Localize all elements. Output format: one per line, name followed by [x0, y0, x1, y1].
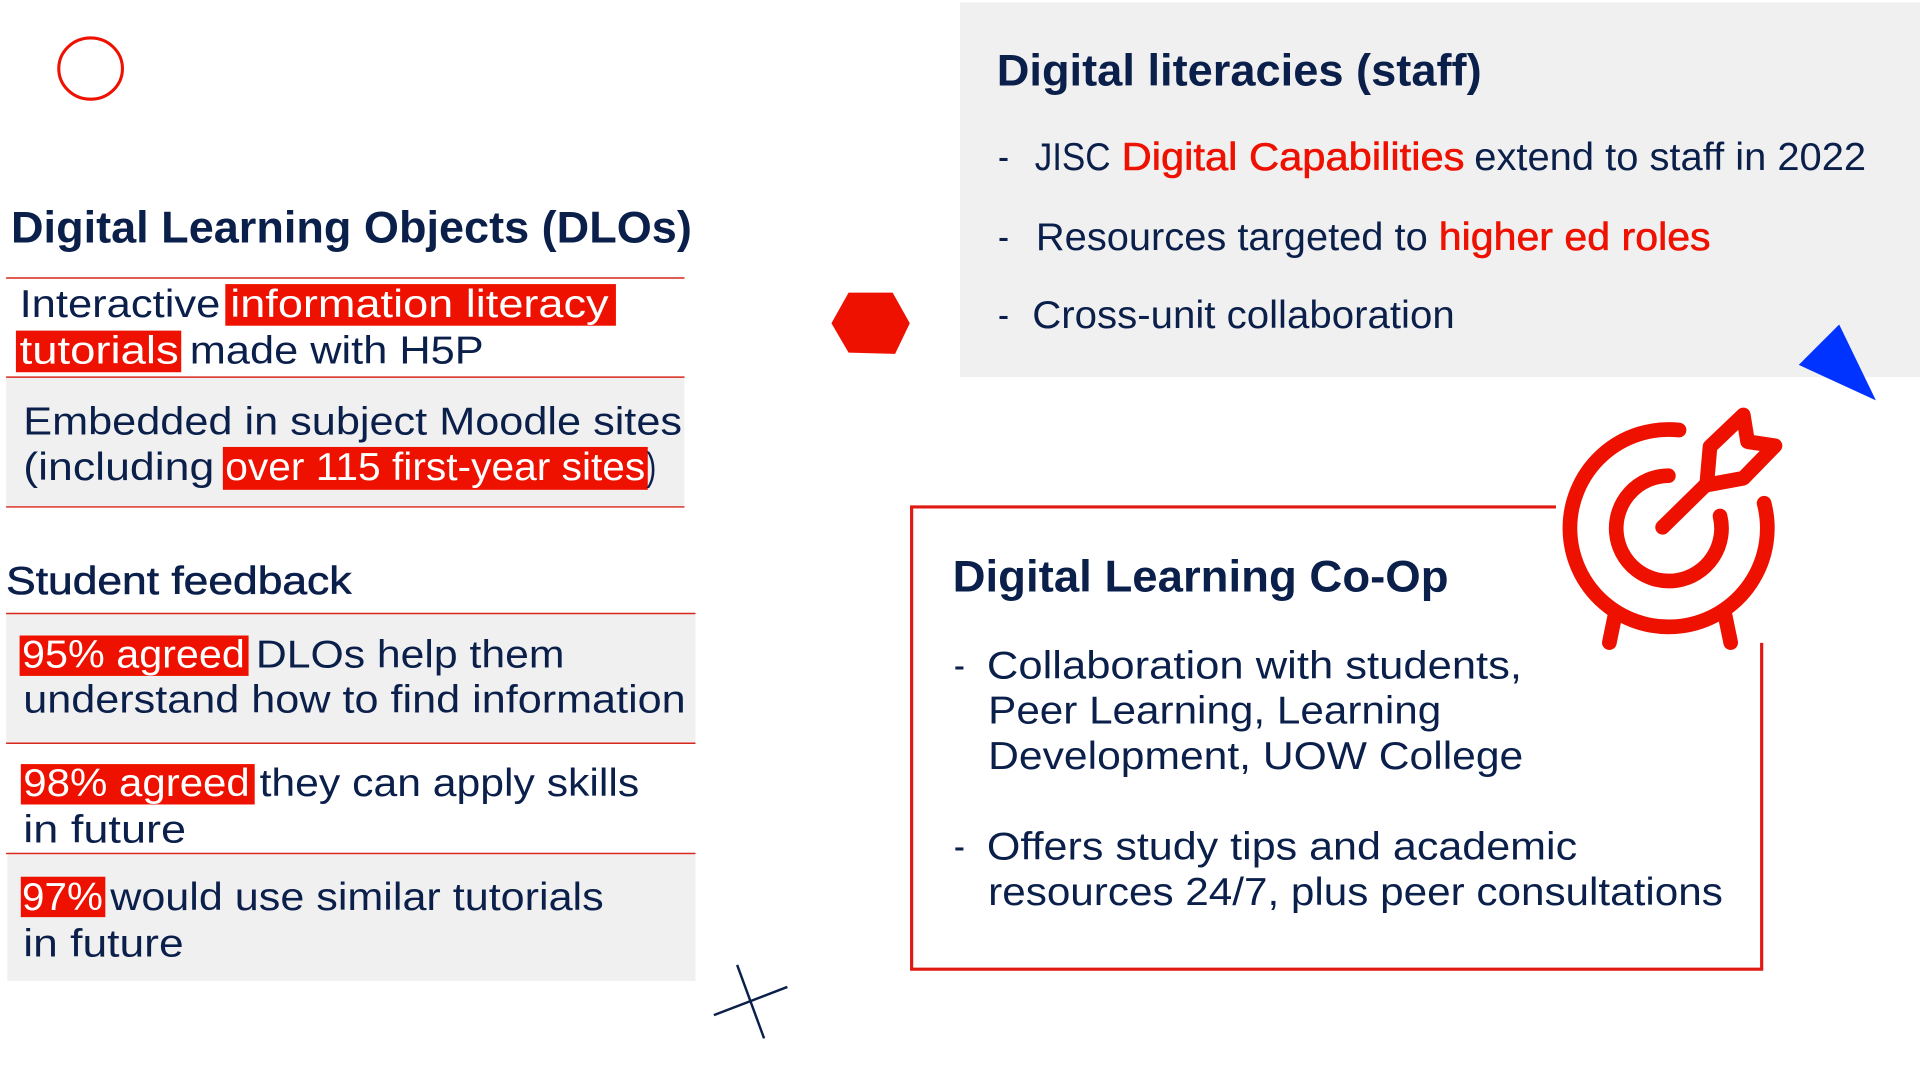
bullet: collaboration: - [998, 294, 1009, 337]
bullet: higher ed roles: - [998, 216, 1009, 259]
stat: 97% would use: 97% [22, 876, 103, 919]
heading: student feedback: Student feedback [6, 560, 352, 603]
heading: DLOs: Digital Learning Objects (DLOs) [11, 203, 692, 252]
panel: student feedback [6, 560, 696, 981]
stat: 98% agreed: they can apply skills [260, 762, 639, 805]
decorative red circle [59, 38, 122, 99]
bullet: higher ed roles: Resources targeted to [1036, 216, 1428, 259]
bullet: JISC capabilities: extend to staff in 2022 [1474, 136, 1866, 179]
bullet: collaboration with students: Development, UOW College [988, 735, 1523, 778]
stat: 98% agreed: in future [23, 808, 186, 851]
row: interactive tutorials: Interactive [20, 283, 220, 326]
row: interactive tutorials: made with H5P [190, 330, 484, 373]
stat: 95% agreed: DLOs help them [256, 633, 564, 676]
row: embedded in Moodle: over 115 first-year sites [225, 446, 645, 489]
bullet: study tips [954, 826, 1723, 914]
decorative navy cross [714, 965, 787, 1038]
bullet: collaboration with students: Collaboration with students, [987, 644, 1522, 687]
bullet: study tips: resources 24/7, plus peer consultations [988, 871, 1723, 914]
heading: co-op: Digital Learning Co-Op [953, 552, 1449, 601]
stat: 98% agreed [6, 743, 696, 853]
heading: digital literacies: Digital literacies (staff) [997, 47, 1482, 96]
row: interactive tutorials: information literacy [230, 283, 609, 326]
bullet: collaboration with students: Peer Learning, Learning [988, 690, 1441, 733]
stat: 97% would use: in future [23, 922, 184, 965]
bullet: higher ed roles [998, 216, 1711, 259]
stat: 97% would use [7, 855, 696, 981]
row: interactive tutorials: tutorials [20, 330, 179, 373]
row: embedded in Moodle [6, 377, 684, 507]
bullet: JISC capabilities: JISC [1035, 136, 1111, 179]
bullet: collaboration with students: - [954, 644, 965, 687]
bullet: JISC capabilities [998, 136, 1866, 179]
row: embedded in Moodle: (including [23, 446, 214, 489]
bullet: study tips: - [954, 826, 965, 869]
row: interactive tutorials [6, 278, 684, 373]
row: embedded in Moodle: Embedded in subject Moodle sites [23, 401, 682, 444]
bullet: study tips: Offers study tips and academic [987, 826, 1577, 869]
row: embedded in Moodle: ) [647, 446, 656, 489]
panel: digital learning co-op [912, 507, 1762, 969]
panel: digital learning objects [6, 203, 692, 507]
bullet: collaboration: Cross-unit collaboration [1032, 294, 1455, 337]
stat: 95% agreed [6, 613, 696, 743]
stat: 98% agreed: 98% agreed [23, 762, 250, 805]
stat: 95% agreed: understand how to find information [23, 679, 686, 722]
bullet: higher ed roles: higher ed roles [1439, 216, 1711, 259]
panel border [912, 507, 1762, 969]
bullet: JISC capabilities: - [998, 136, 1009, 179]
panel: digital literacies [960, 2, 1920, 377]
bullet: collaboration with students [954, 644, 1523, 778]
icon: target with arrow [1570, 415, 1775, 643]
bullet: JISC capabilities: Digital Capabilities [1122, 136, 1464, 179]
stat: 95% agreed: 95% agreed [22, 633, 245, 676]
decorative red hexagon [831, 293, 910, 354]
stat: 97% would use: would use similar tutorials [109, 876, 604, 919]
decorative blue triangle [1799, 324, 1876, 400]
